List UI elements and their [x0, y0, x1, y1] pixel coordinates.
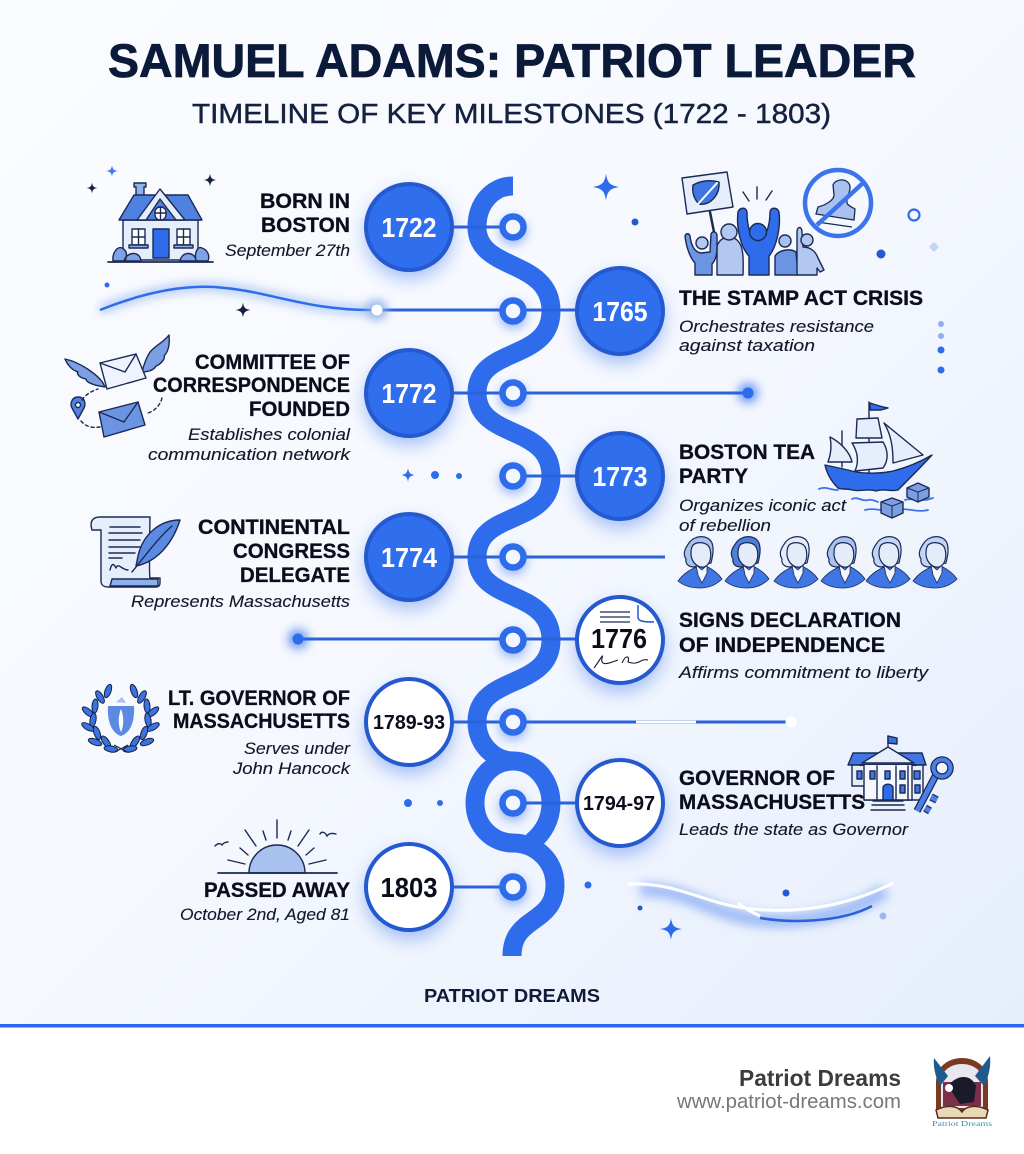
footer logo: eagle over book: [932, 1056, 992, 1128]
footer logo: eagle over book: Patriot Dreams: [932, 1119, 992, 1128]
badge 1776 with document and signature: 1776: [591, 623, 647, 654]
line end dot 1776: [288, 629, 308, 649]
text: Boston Tea Party: BOSTON TEA: [679, 441, 815, 464]
badge 1776 with document and signature: [577, 597, 663, 683]
text: Governor: GOVERNOR OF: [679, 767, 835, 790]
icon: laurel wreath with shield: [80, 683, 161, 753]
footer band: [0, 1024, 1024, 1154]
badge 1765: [577, 268, 663, 354]
text: Governor: Leads the state as Governor: [679, 820, 909, 839]
badge 1803: [366, 844, 452, 930]
brand label: PATRIOT DREAMS: [424, 986, 600, 1006]
text: Committee of Correspondence: Establishes colonial: [188, 425, 351, 444]
timeline node rings: [499, 216, 527, 905]
badge 1722: [366, 184, 452, 270]
badge 1774: 1774: [381, 542, 437, 573]
text: Committee of Correspondence: CORRESPONDENCE: [153, 374, 350, 397]
text: Signs Declaration: Affirms commitment to liberty: [678, 663, 930, 682]
text: Lt. Governor: MASSACHUSETTS: [173, 710, 350, 733]
badge 1772: 1772: [382, 378, 436, 409]
icon: protest crowd with sign: [682, 172, 824, 275]
icon: ship: [819, 402, 933, 518]
badge 1722: 1722: [382, 212, 436, 243]
text: Born in Boston: BORN IN: [260, 190, 350, 213]
badge 1789-93: 1789-93: [373, 712, 445, 734]
text: Passed Away: [180, 879, 350, 924]
serpentine timeline ribbon: [475, 186, 555, 956]
text: Born in Boston: BOSTON: [261, 214, 350, 237]
icon: winged envelopes: [65, 335, 169, 437]
badge 1765: 1765: [592, 296, 648, 327]
icon: scroll and quill: [91, 517, 180, 587]
connector lines: [298, 227, 791, 887]
text: Stamp Act Crisis: against taxation: [679, 336, 815, 355]
badge 1773: [577, 433, 663, 519]
text: Lt. Governor: [168, 687, 352, 778]
text: Lt. Governor: John Hancock: [232, 759, 352, 778]
text: Signs Declaration: SIGNS DECLARATION: [679, 609, 901, 632]
icon: house: [108, 183, 213, 262]
text: Lt. Governor: Serves under: [244, 739, 351, 758]
text: Passed Away: PASSED AWAY: [204, 879, 350, 902]
text: Committee of Correspondence: COMMITTEE OF: [195, 351, 350, 374]
decoration: top left wave: [100, 287, 387, 320]
subtitle: TIMELINE OF KEY MILESTONES (1722 - 1803): [192, 98, 831, 129]
text: Boston Tea Party: of rebellion: [679, 516, 771, 535]
badge 1772: [366, 350, 452, 436]
text: Lt. Governor: LT. GOVERNOR OF: [168, 687, 350, 710]
text: Boston Tea Party: Organizes iconic act: [679, 496, 847, 515]
text: Stamp Act Crisis: Orchestrates resistance: [679, 317, 874, 336]
badge 1773: 1773: [592, 461, 648, 492]
badge 1794-97: [577, 760, 663, 846]
text: Committee of Correspondence: communication network: [148, 445, 352, 464]
text: Born in Boston: [225, 190, 350, 260]
decoration: lower right wave: [628, 883, 893, 921]
text: Continental Congress Delegate: CONGRESS: [233, 540, 350, 563]
text: Governor: MASSACHUSETTS: [679, 791, 865, 814]
year badge shadows: [365, 191, 664, 939]
text: Continental Congress Delegate: CONTINENTAL: [198, 516, 350, 539]
text: Continental Congress Delegate: [131, 516, 351, 611]
line end dot 1772: [738, 383, 758, 403]
text: Born in Boston: September 27th: [225, 241, 350, 260]
badge 1794-97: 1794-97: [583, 793, 655, 815]
text: Passed Away: October 2nd, Aged 81: [180, 905, 350, 924]
text: Stamp Act Crisis: [679, 287, 923, 355]
text: Governor: [679, 767, 909, 839]
icon: six founders portraits: [678, 537, 957, 588]
text: Signs Declaration: OF INDEPENDENCE: [679, 634, 885, 657]
text: Committee of Correspondence: [148, 351, 352, 464]
icon: no stamp: [805, 170, 871, 236]
badge 1789-93: [366, 679, 452, 765]
badge 1803: 1803: [380, 872, 438, 903]
badge 1774: [366, 514, 452, 600]
decoration: stars and dots: [86, 165, 944, 940]
text: Boston Tea Party: PARTY: [679, 465, 748, 488]
icon: state house and key: [848, 736, 950, 811]
text: Boston Tea Party: [679, 441, 847, 535]
footer brand name: Patriot Dreams: [739, 1065, 901, 1091]
title: SAMUEL ADAMS: PATRIOT LEADER: [108, 34, 916, 87]
text: Signs Declaration: [678, 609, 930, 682]
icon: sunset: [215, 820, 337, 873]
text: Stamp Act Crisis: THE STAMP ACT CRISIS: [679, 287, 923, 310]
text: Committee of Correspondence: FOUNDED: [249, 398, 350, 421]
line end dot 1789 with highlight: [615, 716, 810, 728]
text: Continental Congress Delegate: Represents Massachusetts: [131, 592, 351, 611]
text: Continental Congress Delegate: DELEGATE: [240, 564, 350, 587]
footer url: www.patriot-dreams.com: [676, 1091, 901, 1113]
